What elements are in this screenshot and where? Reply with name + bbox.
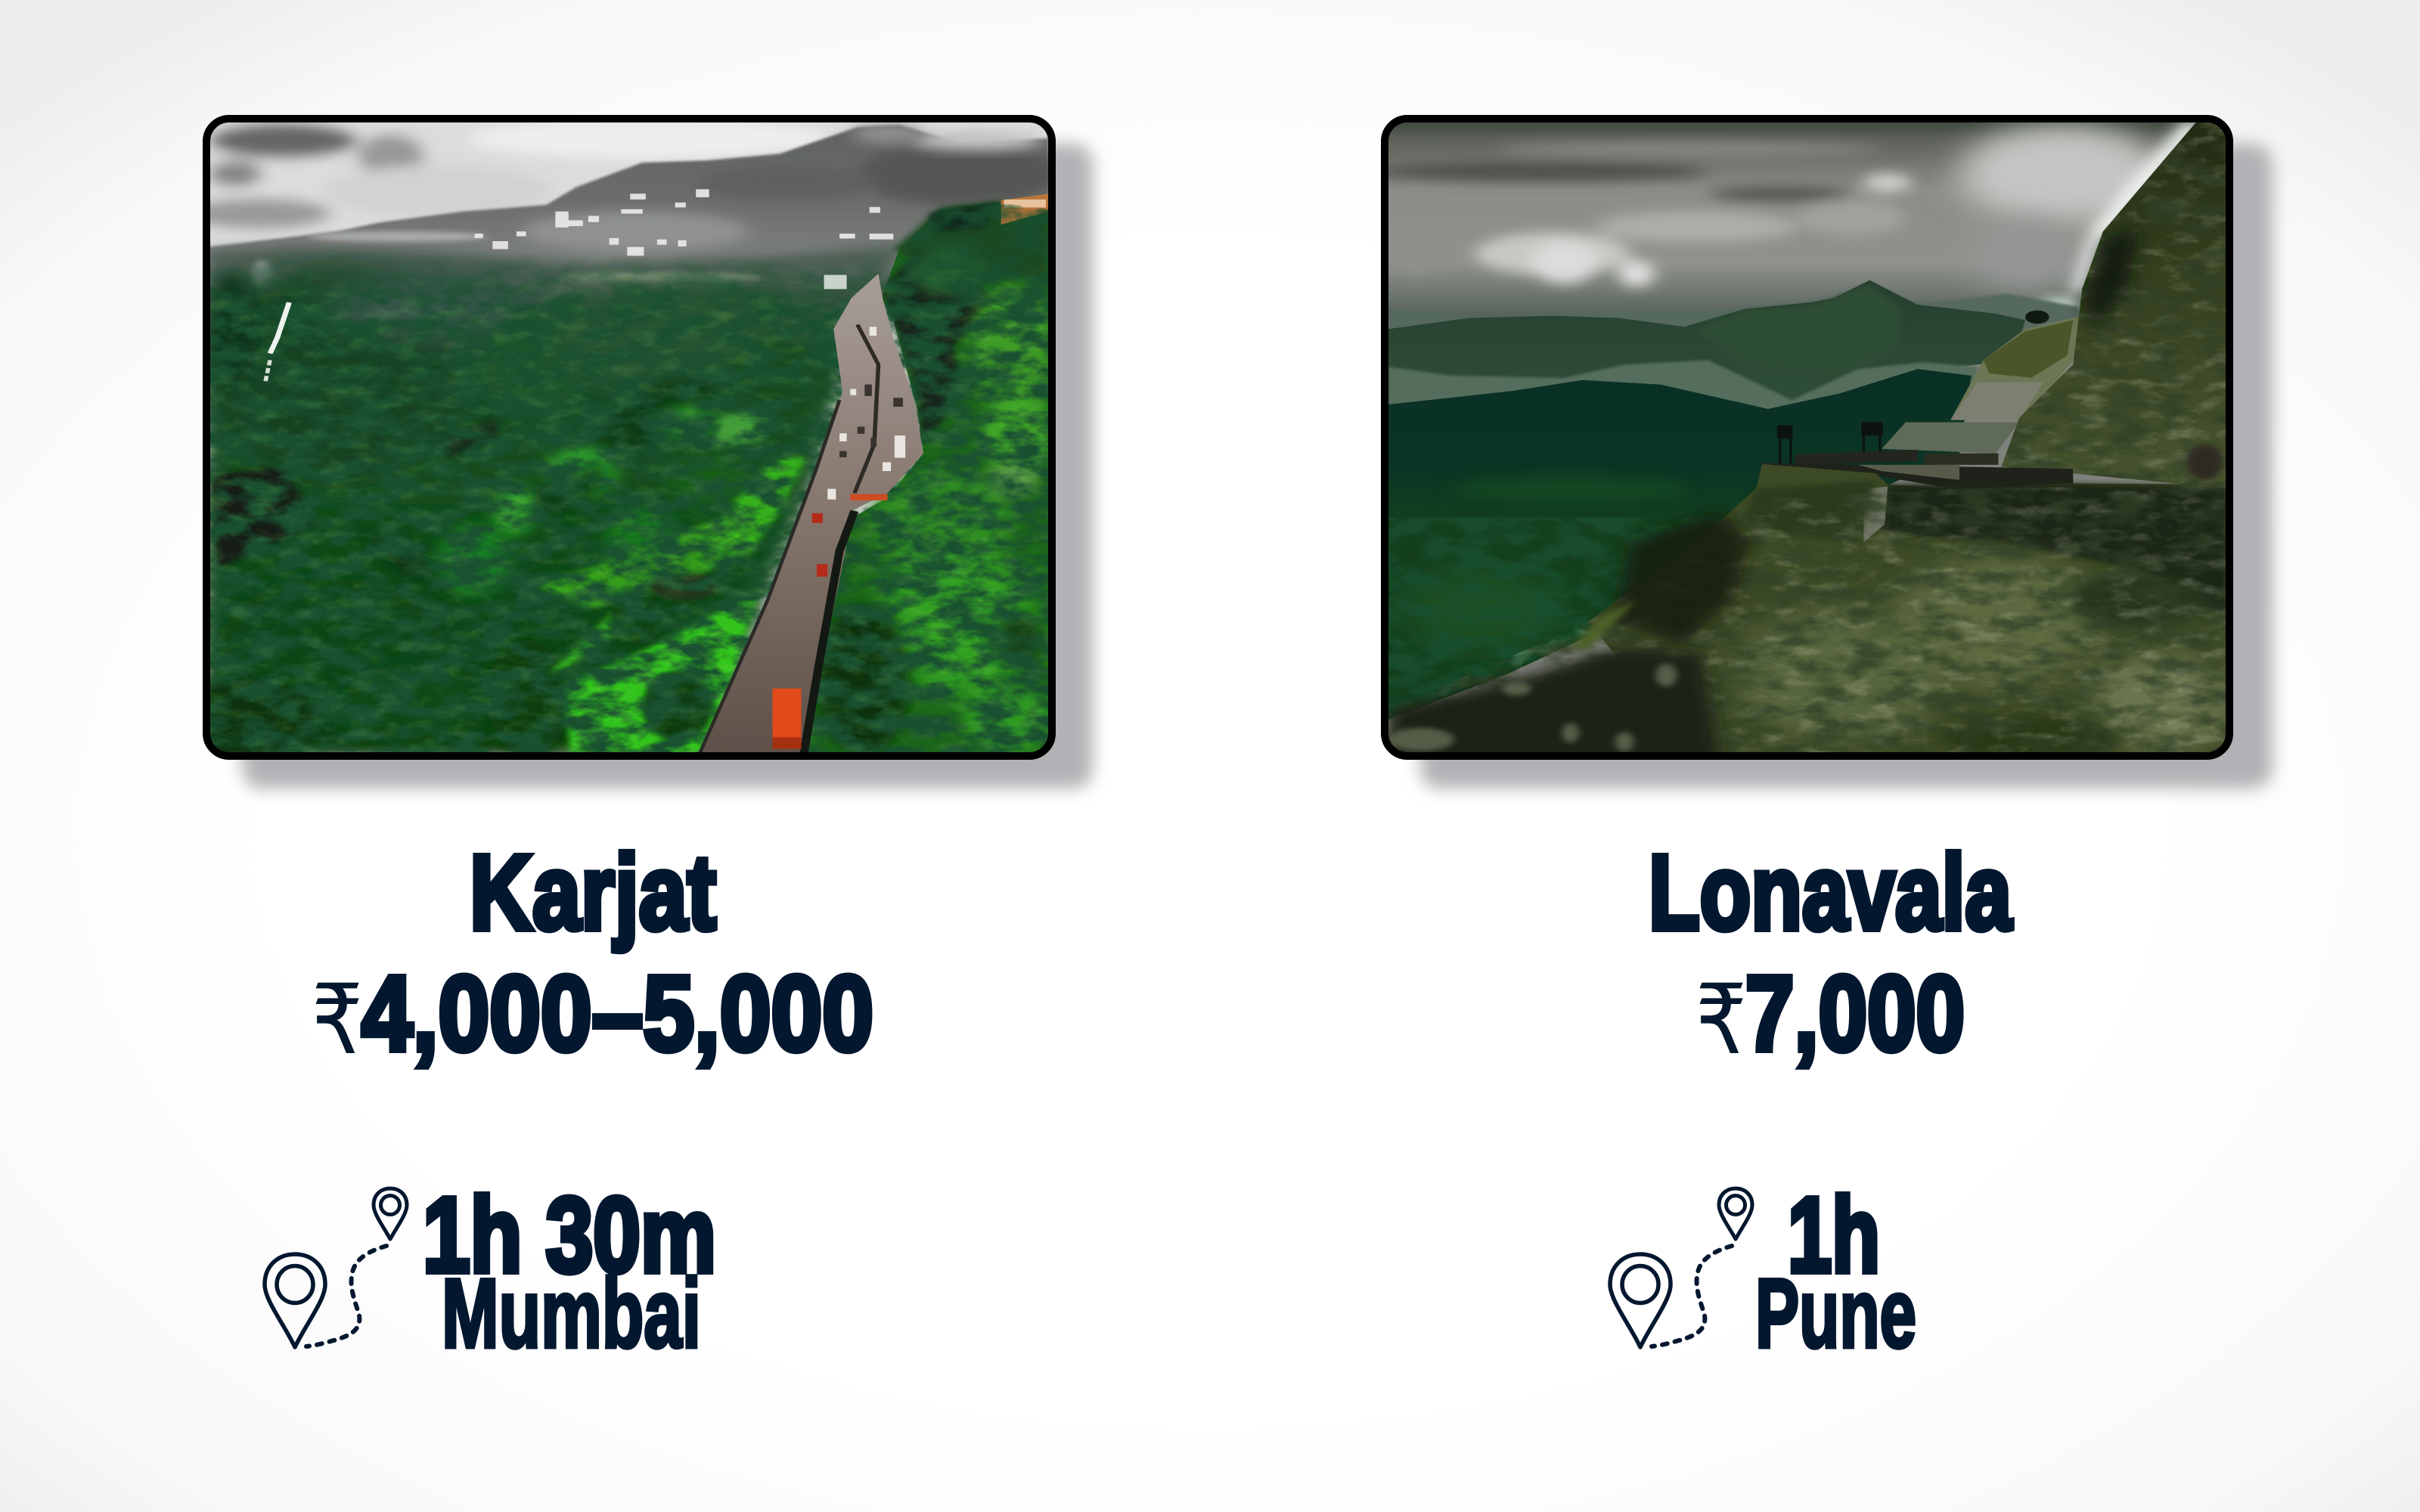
heading: Lonavala: Lonavala [1649, 832, 2012, 952]
icon: route pins Karjat [265, 1188, 407, 1347]
price: Lonavala: 7,000 [1745, 953, 1965, 1073]
panel: Karjat [163, 116, 1093, 1368]
photo card: Lonavala ghat road and cliff [1373, 116, 2273, 789]
travel time: 1h 30m: 1h 30m [423, 1175, 716, 1294]
heading: Karjat: Karjat [470, 832, 716, 952]
price: Karjat: 4,000–5,000 [361, 953, 873, 1073]
origin city: Mumbai: Mumbai [442, 1258, 701, 1368]
travel time: 1h: 1h [1788, 1175, 1880, 1294]
icon: route pins Lonavala [1610, 1188, 1752, 1347]
origin city: Pune: Pune [1755, 1258, 1916, 1368]
price: Karjat: ₹ [312, 966, 363, 1074]
photo card: Karjat highway and valley [163, 116, 1093, 789]
price: Lonavala: ₹ [1696, 966, 1747, 1074]
panel: Lonavala [1373, 116, 2273, 1368]
price: Lonavala [1696, 953, 1965, 1074]
